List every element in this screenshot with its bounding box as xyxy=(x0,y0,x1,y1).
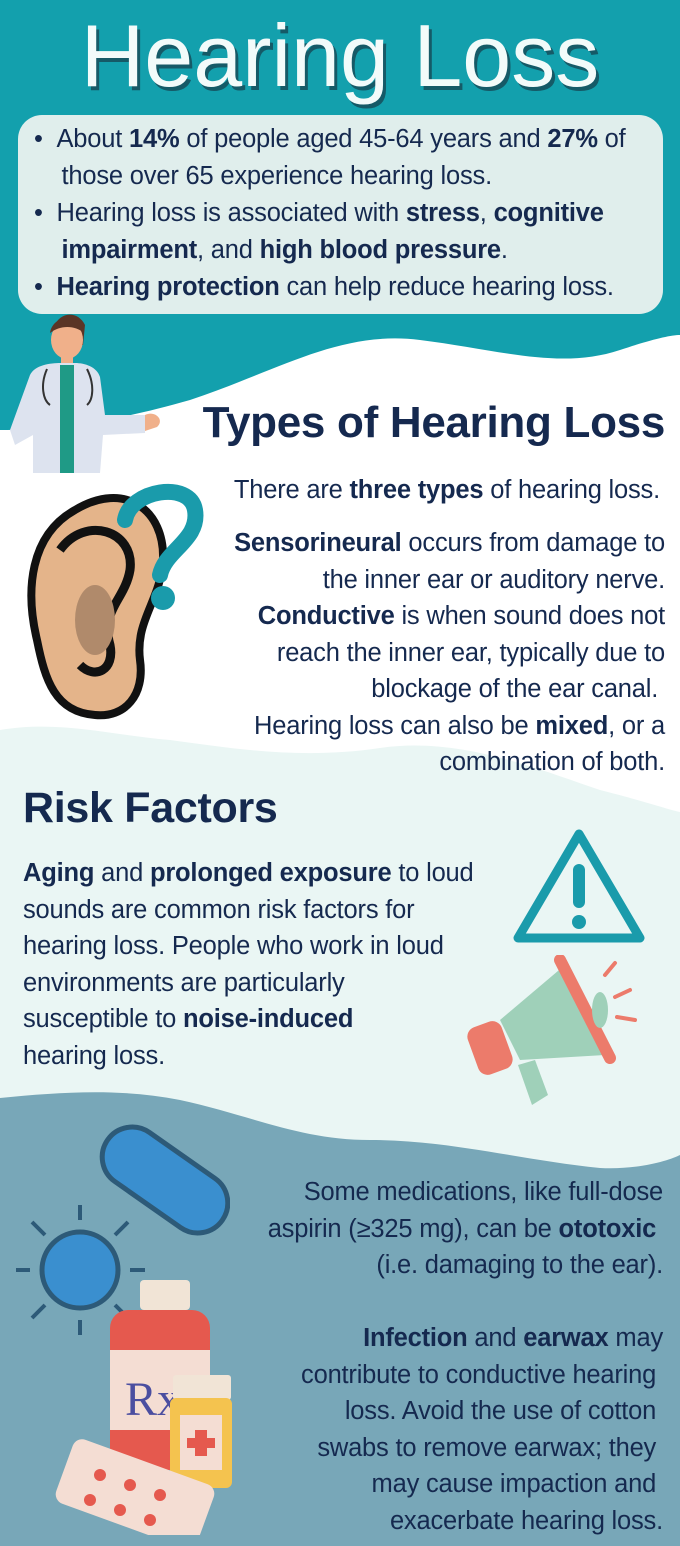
bullet list: • Hearing protection can help reduce hearing loss. xyxy=(34,273,614,301)
text block: type descriptions: reach the inner ear, typically due to xyxy=(277,638,665,666)
text block: types: There are three types of hearing loss. xyxy=(234,476,660,504)
text block: type descriptions: Conductive is when sound does not xyxy=(258,602,665,630)
bullet list: • Hearing loss is associated with stress, cognitive xyxy=(34,199,604,227)
text block: medications xyxy=(268,1178,663,1279)
text block: type descriptions: Hearing loss can also be mixed, or a xyxy=(254,712,665,740)
title: Hearing Loss xyxy=(81,6,599,105)
text block: infection and earwax: loss. Avoid the use of cotton xyxy=(345,1397,656,1425)
text block: type descriptions: Sensorineural occurs from damage to xyxy=(234,529,665,557)
text block: risk factors: hearing loss. xyxy=(23,1042,165,1070)
bullet list: impairment, and high blood pressure. xyxy=(62,236,508,264)
text block: infection and earwax xyxy=(301,1324,664,1534)
text block: infection and earwax: swabs to remove earwax; they xyxy=(317,1434,656,1462)
bullet list xyxy=(34,125,626,301)
bullet list: • About 14% of people aged 45-64 years and 27% of xyxy=(34,125,626,153)
text block: risk factors: hearing loss. People who work in loud xyxy=(23,932,444,960)
text block: infection and earwax: Infection and earwax may xyxy=(363,1324,663,1352)
text block: medications: aspirin (≥325 mg), can be ototoxic xyxy=(268,1214,656,1242)
heading: risk factors: Risk Factors xyxy=(23,784,278,832)
text block: risk factors: sounds are common risk factors for xyxy=(23,896,414,924)
icon: ear with question mark xyxy=(27,484,204,720)
icon: warning triangle xyxy=(514,830,644,942)
icon: medication bottles and pills xyxy=(56,1280,232,1535)
text block: medications: Some medications, like full-dose xyxy=(304,1178,663,1206)
text block: infection and earwax: exacerbate hearing loss. xyxy=(390,1506,663,1534)
text block: risk factors xyxy=(23,859,474,1070)
text block: risk factors: Aging and prolonged exposure to loud xyxy=(23,859,474,887)
icon: medication bottles and pills: Rx xyxy=(125,1373,181,1426)
text block: risk factors: susceptible to noise-induced xyxy=(23,1005,353,1033)
text block: risk factors: environments are particularly xyxy=(23,968,345,996)
text block: infection and earwax: contribute to conductive hearing xyxy=(301,1360,656,1388)
text block: type descriptions: combination of both. xyxy=(439,748,665,776)
text block: medications: (i.e. damaging to the ear). xyxy=(376,1251,663,1279)
icon: bacteria and virus xyxy=(16,1124,230,1335)
text block: type descriptions: blockage of the ear canal. xyxy=(371,675,658,703)
icon: megaphone xyxy=(467,955,637,1105)
icon: doctor xyxy=(10,314,160,473)
bullet list: those over 65 experience hearing loss. xyxy=(62,162,492,190)
text block: type descriptions xyxy=(234,529,666,776)
text block: type descriptions: the inner ear or auditory nerve. xyxy=(323,566,665,594)
text block: infection and earwax: may cause impaction and xyxy=(372,1470,656,1498)
heading: types of hearing loss: Types of Hearing Loss xyxy=(203,398,665,447)
panel: key facts xyxy=(18,115,663,314)
